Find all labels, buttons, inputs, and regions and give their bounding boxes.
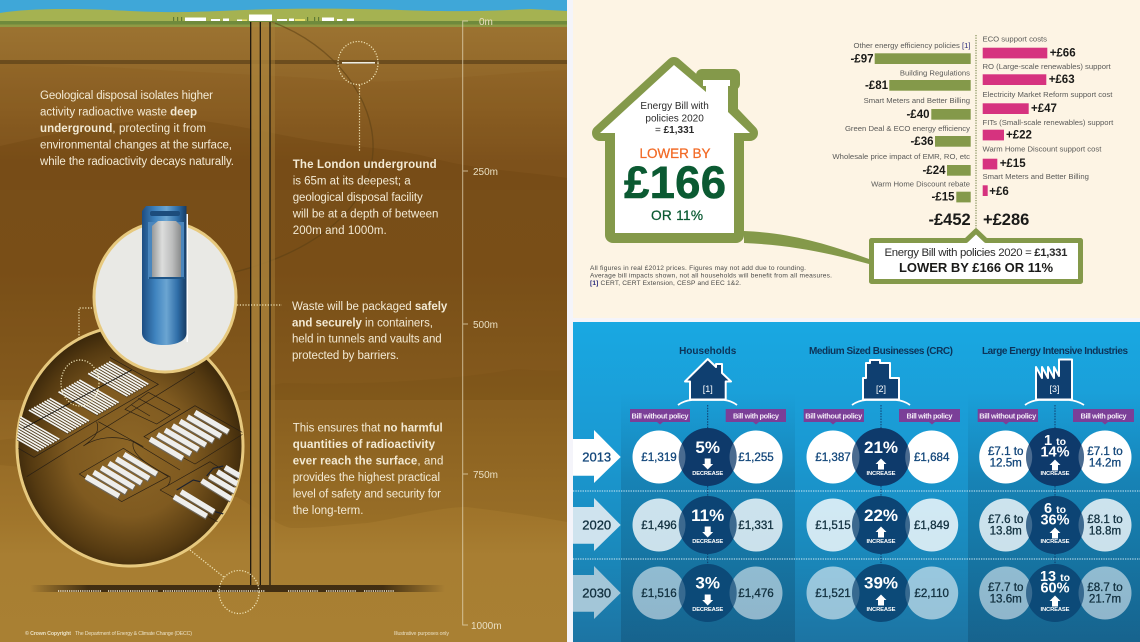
cell: industries 2013: £7.1 to: [1087, 445, 1123, 458]
cell: businesses 2013: [806, 428, 958, 486]
label text: Bill without policy: [632, 411, 689, 420]
cell: households 2013: £1,255: [738, 451, 774, 464]
cell: households 2020: [632, 496, 782, 554]
rock strata: [0, 119, 567, 521]
cell: industries 2013: £7.1 to: [988, 445, 1023, 458]
cell: industries 2020: £7.6 to: [988, 513, 1023, 526]
cell: industries 2020: [979, 496, 1132, 554]
text: waste packaging: and securely in containers,: [292, 317, 433, 329]
cell: businesses 2030: £1,521: [815, 587, 851, 600]
chart: cost bars: +£63: [1049, 74, 1075, 86]
totals: -£452: [928, 211, 971, 229]
cell: industries 2020: 18.8m: [1089, 525, 1121, 538]
cell: households 2030: [632, 564, 782, 622]
ground: [0, 26, 567, 642]
totals: +£286: [983, 211, 1029, 229]
house text: £166: [624, 157, 726, 208]
depth scale: 250m: [473, 167, 498, 178]
purple labels: [630, 409, 1134, 424]
cell: industries 2030: 13.6m: [990, 593, 1022, 606]
cell: industries 2020: 13.8m: [990, 525, 1022, 538]
dotted inset marker: [61, 360, 99, 406]
house text: = £1,331: [655, 125, 695, 136]
text: safety statement: level of safety and security for: [293, 489, 441, 501]
cell: industries 2020: 6 to: [1044, 501, 1066, 517]
cell: industries 2030: £8.7 to: [1087, 581, 1123, 594]
panel: bill impacts by consumer: [573, 322, 1140, 642]
icon: factory: [1025, 360, 1084, 405]
callout: result: [872, 231, 1080, 282]
footnote: All figures in real £2012 prices. Figures may not add due to rounding.: [590, 265, 806, 272]
heading: large industries: Large Energy Intensive Industries: [982, 346, 1128, 357]
cell: industries 2020: 36%: [1040, 513, 1070, 529]
cell: households 2020: DECREASE: [692, 539, 723, 545]
chart: cost bars: +£66: [1050, 48, 1076, 60]
dotted connectors: [79, 305, 282, 614]
centre axis: [975, 35, 977, 232]
icon: house: [678, 359, 737, 405]
house text: policies 2020: [645, 114, 704, 125]
hills: [0, 8, 567, 21]
chart: savings bars: Warm Home Discount rebate: [871, 180, 970, 189]
cell: households 2020: £1,496: [641, 519, 677, 532]
footnote: [1] CERT, CERT Extension, CESP and EEC 1&2.: [590, 280, 741, 287]
cell: households 2020: £1,331: [738, 519, 774, 532]
cell: industries 2013: 14.2m: [1089, 457, 1121, 470]
cell: households 2030: DECREASE: [692, 607, 723, 613]
cell: households 2013: [632, 428, 782, 486]
cell: industries 2013: INCREASE: [1040, 471, 1070, 477]
zoom circle: waste container: [94, 206, 236, 372]
text: waste packaging: Waste will be packaged safely: [292, 301, 448, 313]
cell: businesses 2020: 22%: [864, 506, 898, 525]
chart: cost bars: RO (Large-scale renewables) support: [982, 62, 1112, 71]
arrow: 2013: [573, 430, 621, 483]
text: safety statement: quantities of radioactivity: [293, 439, 436, 451]
chart: cost bars: Electricity Market Reform support cost: [982, 90, 1113, 99]
chart: cost bars: +£22: [1006, 130, 1032, 142]
chart: savings bars: -£40: [906, 109, 930, 121]
cell: industries 2030: [979, 564, 1132, 622]
text: london underground: is 65m at its deepest; a: [293, 176, 411, 188]
bottom facility strip: [30, 585, 445, 592]
cell: households 2030: 3%: [695, 574, 720, 592]
sky: [0, 0, 567, 13]
chart: savings bars: Green Deal & ECO energy efficiency: [845, 124, 970, 133]
footnote: [590, 265, 832, 287]
cell: industries 2030: 13 to: [1040, 569, 1070, 585]
text: safety statement: provides the highest practical: [293, 472, 440, 484]
chart: cost bars: FITs (Small-scale renewables) support: [982, 118, 1114, 127]
arrow: 2020: 2020: [582, 518, 611, 532]
icon: office building: [852, 360, 910, 405]
cell: businesses 2030: INCREASE: [866, 607, 896, 613]
chart: savings bars: -£24: [922, 165, 946, 177]
text: geological disposal intro: underground, protecting it from: [40, 123, 206, 135]
text: london underground: will be at a depth of between: [292, 208, 438, 220]
icon: office building: [2]: [876, 384, 886, 394]
text: safety statement: [293, 423, 443, 517]
cell: industries 2020: £8.1 to: [1087, 513, 1123, 526]
cell: industries 2013: 12.5m: [990, 457, 1022, 470]
label text: Bill with policy: [733, 411, 780, 420]
callout: result: Energy Bill with policies 2020 = £1,331: [884, 247, 1068, 259]
text: safety statement: This ensures that no harmful: [293, 423, 443, 435]
cell: industries 2020: INCREASE: [1040, 539, 1070, 545]
text: waste packaging: held in tunnels and vaults and: [292, 334, 442, 346]
cell: businesses 2020: INCREASE: [866, 539, 896, 545]
text: geological disposal intro: activity radioactive waste deep: [40, 106, 197, 118]
copyright footer: [25, 631, 449, 636]
label text: Bill without policy: [979, 411, 1037, 420]
cell: businesses 2030: £2,110: [914, 587, 949, 600]
text: geological disposal intro: Geological disposal isolates higher: [40, 90, 213, 102]
text: london underground: [292, 159, 438, 237]
house text: OR 11%: [651, 208, 703, 223]
chart: savings bars: [832, 41, 971, 204]
chart: cost bars: ECO support costs: [982, 35, 1047, 44]
cell: industries 2013: 14%: [1040, 445, 1070, 461]
cell: households 2020: 11%: [691, 506, 724, 525]
text: geological disposal intro: environmental changes at the surface,: [40, 140, 232, 152]
house text: LOWER BY: [640, 146, 710, 161]
icon: blue waste canister: [142, 206, 188, 345]
house text: [624, 101, 726, 223]
text: geological disposal intro: [39, 90, 234, 168]
cell: businesses 2020: £1,515: [815, 519, 851, 532]
cell: businesses 2030: 39%: [864, 574, 898, 592]
chart: cost bars: +£47: [1031, 103, 1057, 115]
totals: [928, 211, 1029, 229]
cell: industries 2030: 60%: [1040, 581, 1070, 597]
cell: industries 2013: 1 to: [1044, 433, 1066, 449]
text: waste packaging: [292, 301, 448, 362]
arrow: 2030: [573, 566, 621, 619]
depth scale: 750m: [473, 470, 498, 481]
callout: result: LOWER BY £166 OR 11%: [899, 260, 1053, 275]
depth scale: 1000m: [471, 621, 502, 632]
copyright footer: © Crown Copyright: [25, 630, 71, 637]
copyright footer: The Department of Energy & Climate Change (DECC): [75, 631, 192, 637]
house: bill summary: [600, 65, 869, 264]
label text: Bill with policy: [906, 411, 953, 420]
cell: industries 2030: £7.7 to: [988, 581, 1023, 594]
chart: savings bars: -£15: [931, 192, 955, 204]
cell: households 2013: DECREASE: [692, 471, 723, 477]
text: london underground: 200m and 1000m.: [293, 225, 387, 237]
surface band: [0, 21, 567, 24]
cell: industries 2013: [979, 428, 1132, 486]
copyright footer: Illustrative purposes only: [394, 631, 449, 637]
footnote: Average bill impacts shown, not all households will benefit from all measures.: [590, 273, 832, 280]
cell: households 2013: £1,319: [641, 451, 677, 464]
london underground depth line: [0, 60, 567, 64]
cell: businesses 2013: 21%: [864, 438, 898, 457]
panel: energy bill breakdown: [573, 0, 1140, 318]
cell: businesses 2013: INCREASE: [866, 471, 896, 477]
chart: savings bars: -£36: [910, 136, 934, 148]
cell: businesses 2013: £1,684: [914, 451, 950, 464]
chart: savings bars: Building Regulations: [900, 69, 970, 78]
surface buildings: [173, 14, 354, 21]
column shading: [621, 393, 1140, 642]
label text: Bill with policy: [1080, 411, 1127, 420]
vault tunnels: [17, 357, 242, 522]
heading: households: Households: [679, 346, 737, 357]
text: geological disposal intro: while the radioactivity decays naturally.: [39, 156, 234, 168]
house text: Energy Bill with: [640, 101, 709, 112]
cell: industries 2030: INCREASE: [1040, 607, 1070, 613]
text: london underground: The London underground: [293, 159, 437, 171]
zoom circle: vault layout: [0, 326, 250, 566]
cell: businesses 2030: [806, 564, 958, 622]
arrow: 2013: 2013: [582, 450, 611, 464]
cell: households 2030: £1,476: [738, 587, 774, 600]
text: safety statement: ever reach the surface, and: [293, 456, 443, 468]
arrow: 2030: 2030: [582, 586, 611, 600]
depth scale: [463, 17, 502, 632]
london tube marker: [342, 62, 375, 64]
cell: businesses 2020: [806, 496, 958, 554]
text: safety statement: the long-term.: [293, 505, 363, 517]
panel: geological disposal cross-section: [0, 0, 567, 642]
connectors: [708, 405, 1055, 565]
text: london underground: geological disposal facility: [293, 192, 423, 204]
spiral access ramp: [235, 22, 373, 272]
arrow: 2020: [573, 498, 621, 551]
row dividers: [573, 491, 1140, 559]
icon: house: [1]: [703, 384, 713, 394]
chart: savings bars: Wholesale price impact of EMR, RO, etc: [832, 152, 970, 161]
cell: households 2013: 5%: [695, 438, 720, 457]
cell: businesses 2013: £1,387: [815, 451, 851, 464]
cell: households 2030: £1,516: [641, 587, 677, 600]
cell: industries 2030: 21.7m: [1089, 593, 1121, 606]
chart: cost bars: [982, 35, 1114, 198]
chart: savings bars: Other energy efficiency policies [1]: [854, 41, 970, 50]
heading: medium businesses: Medium Sized Businesses (CRC): [809, 346, 953, 357]
chart: savings bars: -£97: [850, 54, 874, 66]
chart: cost bars: Warm Home Discount support cost: [982, 145, 1102, 154]
chart: cost bars: +£15: [1000, 158, 1026, 170]
chart: cost bars: Smart Meters and Better Billing: [982, 172, 1089, 181]
depth scale: 500m: [473, 320, 498, 331]
dotted callout: underground: [338, 42, 378, 151]
cell: businesses 2020: £1,849: [914, 519, 949, 532]
chart: savings bars: Smart Meters and Better Billing: [864, 96, 970, 105]
depth scale: 0m: [479, 17, 493, 28]
label text: Bill without policy: [805, 411, 863, 420]
chart: cost bars: +£6: [989, 186, 1009, 198]
text: waste packaging: protected by barriers.: [292, 350, 399, 362]
access shafts: [251, 22, 275, 585]
icon: factory: [3]: [1049, 384, 1060, 394]
label text: [632, 411, 1127, 420]
chart: savings bars: -£81: [865, 80, 889, 92]
